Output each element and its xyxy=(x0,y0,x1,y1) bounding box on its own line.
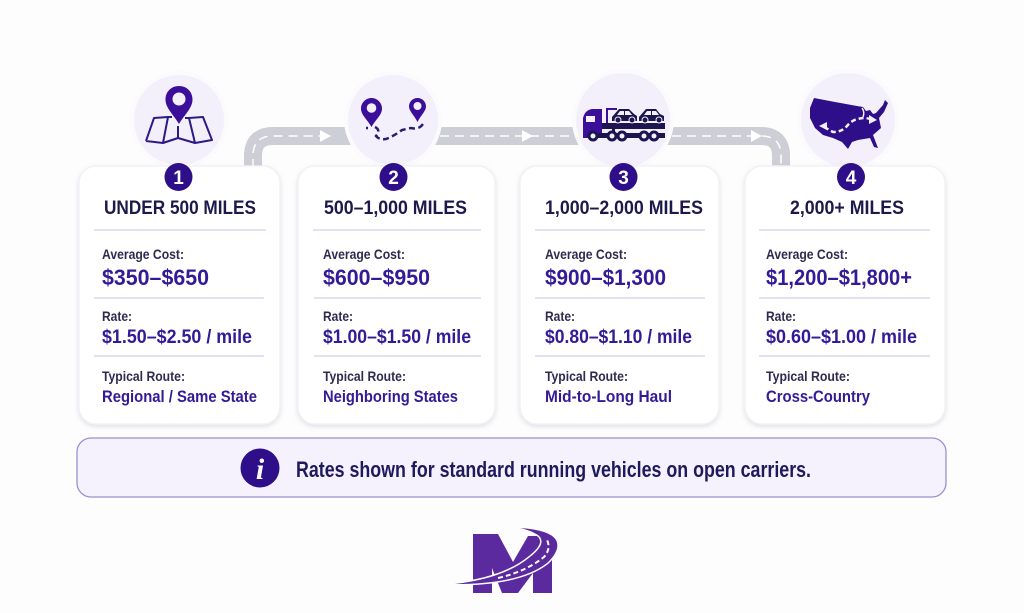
rate xyxy=(766,308,917,348)
rate: $1.50–$2.50 / mile xyxy=(102,326,252,348)
typical route: Typical Route: xyxy=(766,368,850,384)
average cost xyxy=(102,246,209,290)
icon: car carrier truck xyxy=(574,71,672,169)
average cost xyxy=(766,246,912,290)
rate: Rate: xyxy=(323,308,353,324)
average cost: $350–$650 xyxy=(102,265,209,290)
rate: $0.60–$1.00 / mile xyxy=(766,326,917,348)
typical route xyxy=(545,368,672,406)
heading: 2,000+ MILES xyxy=(790,197,904,219)
road connecting the steps xyxy=(253,130,781,170)
note text: Rates shown for standard running vehicles on open carriers. xyxy=(296,457,811,482)
average cost: Average Cost: xyxy=(545,246,627,262)
typical route: Typical Route: xyxy=(102,368,185,384)
rate: $0.80–$1.10 / mile xyxy=(545,326,692,348)
rate xyxy=(102,308,252,348)
rate: Rate: xyxy=(102,308,132,324)
rate: Rate: xyxy=(766,308,796,324)
average cost: $1,200–$1,800+ xyxy=(766,265,912,290)
typical route: Neighboring States xyxy=(323,387,458,406)
average cost: Average Cost: xyxy=(766,246,848,262)
heading: 1,000–2,000 MILES xyxy=(545,197,703,219)
step badge 2: 2 xyxy=(388,168,399,189)
step badge 1 xyxy=(164,163,192,191)
average cost xyxy=(545,246,666,290)
average cost: Average Cost: xyxy=(323,246,405,262)
step badge 3 xyxy=(610,163,638,191)
panel: 1000-2000 miles xyxy=(520,163,719,424)
rate: $1.00–$1.50 / mile xyxy=(323,326,471,348)
typical route xyxy=(102,368,257,406)
average cost: Average Cost: xyxy=(102,246,184,262)
step badge 4 xyxy=(837,163,865,191)
typical route: Typical Route: xyxy=(545,368,628,384)
typical route: Typical Route: xyxy=(323,368,406,384)
typical route xyxy=(323,368,458,406)
typical route: Cross-Country xyxy=(766,387,870,406)
rate xyxy=(545,308,692,348)
icon: info xyxy=(240,448,280,488)
heading: UNDER 500 MILES xyxy=(104,197,256,219)
panel: 500-1000 miles xyxy=(298,163,495,424)
icon: map with pin xyxy=(132,73,226,167)
typical route xyxy=(766,368,870,406)
step badge 1: 1 xyxy=(173,168,184,189)
typical route: Mid-to-Long Haul xyxy=(545,387,672,406)
icon: USA map with route xyxy=(799,71,897,169)
heading: 500–1,000 MILES xyxy=(324,197,467,219)
average cost xyxy=(323,246,430,290)
rate: Rate: xyxy=(545,308,575,324)
panel: 2000+ miles xyxy=(745,163,945,424)
step badge 2 xyxy=(380,163,408,191)
icon: info: i xyxy=(256,453,265,486)
callout: rates note xyxy=(77,438,946,497)
logo xyxy=(455,528,557,593)
average cost: $600–$950 xyxy=(323,265,430,290)
step badge 3: 3 xyxy=(618,168,629,189)
average cost: $900–$1,300 xyxy=(545,265,666,290)
step badge 4: 4 xyxy=(846,168,857,189)
panel: under 500 miles xyxy=(79,163,280,424)
rate xyxy=(323,308,471,348)
icon: route between two pins xyxy=(346,73,440,167)
typical route: Regional / Same State xyxy=(102,387,257,406)
